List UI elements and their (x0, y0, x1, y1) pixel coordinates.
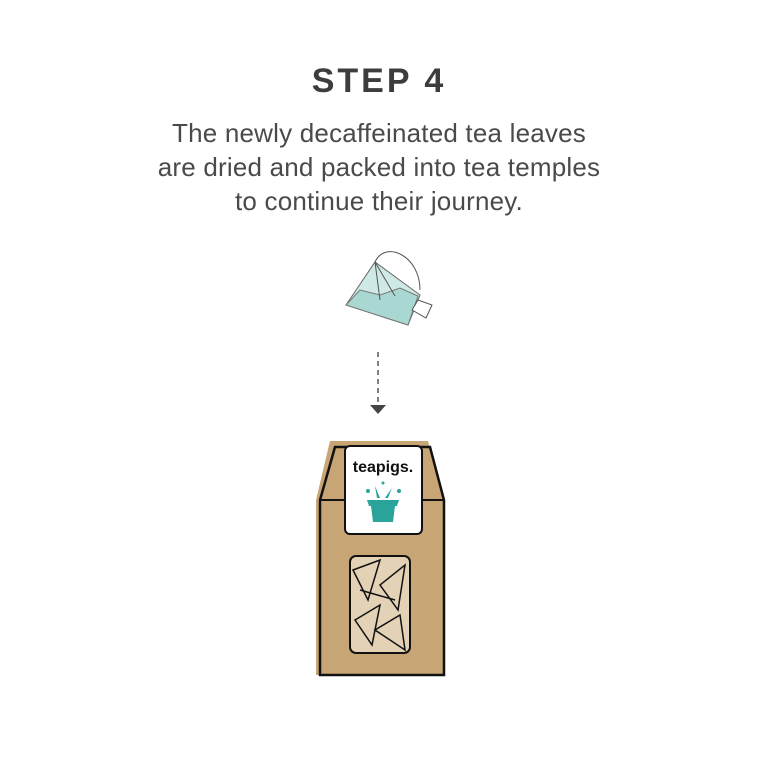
icon: magic hat (366, 482, 401, 522)
description text (158, 118, 600, 216)
window with tea bags (350, 556, 410, 653)
icon: tea bag (346, 252, 432, 325)
icon: tea box: teapigs. (353, 459, 413, 476)
arrow: dashed down (370, 352, 386, 414)
title: STEP 4 (312, 62, 446, 100)
description text: are dried and packed into tea temples (158, 152, 600, 182)
description text: to continue their journey. (235, 186, 523, 216)
description text: The newly decaffeinated tea leaves (172, 118, 586, 148)
label (345, 446, 422, 534)
icon: tea box (316, 441, 445, 675)
